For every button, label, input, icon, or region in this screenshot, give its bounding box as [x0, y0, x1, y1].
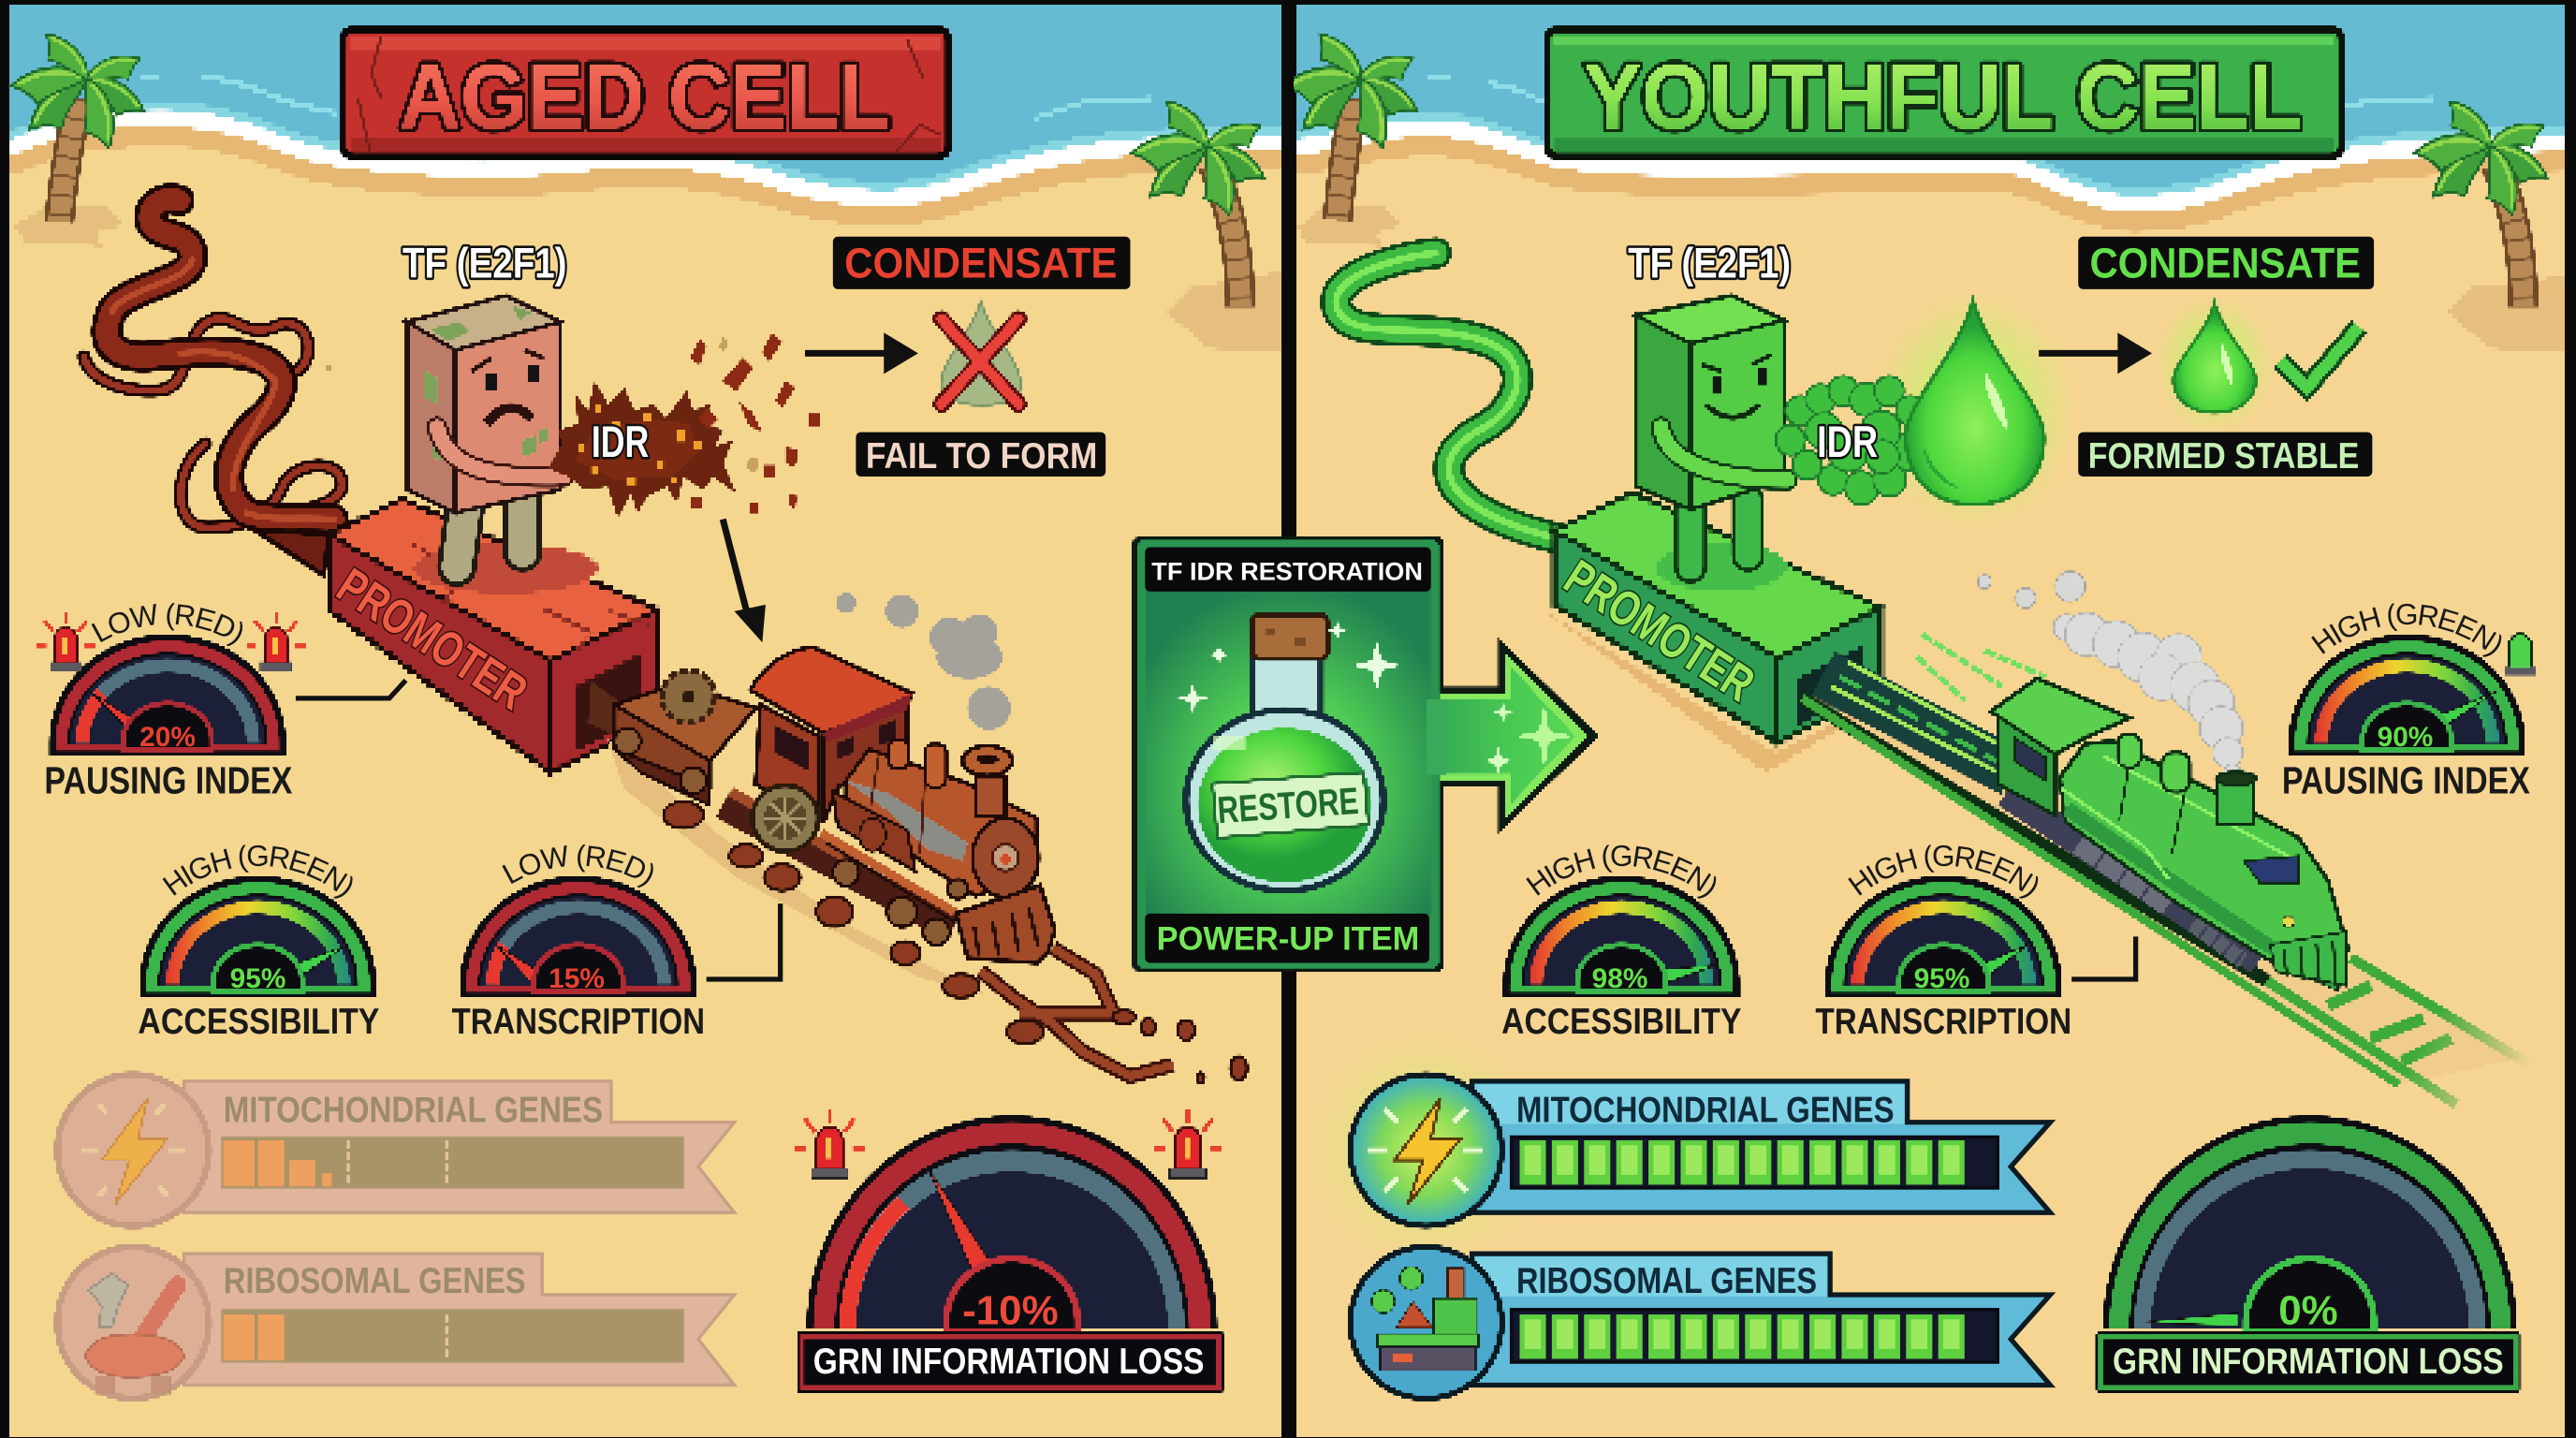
- palm tree: youthful left: [1283, 27, 1422, 220]
- value 95%: 95%: [1914, 963, 1969, 994]
- palm tree: aged left: [9, 27, 149, 222]
- gauge name: PAUSING INDEX: [44, 759, 292, 802]
- chromatin ribbon: youthful: [1336, 253, 1560, 539]
- high label: HIGH (GREEN): [1848, 844, 2039, 899]
- title text: YOUTHFUL CELL: [1584, 45, 2302, 148]
- beach background: aged: [10, 5, 1283, 1438]
- gene bar: ribosomal aged: [184, 1254, 735, 1386]
- character label: TF E2F1: TF (E2F1): [402, 240, 567, 287]
- palm tree: youthful right: [2413, 95, 2553, 307]
- IDR label: IDR: [592, 418, 649, 467]
- title banner: youthful cell: [1544, 26, 2345, 159]
- tangled chromatin: aged: [84, 199, 342, 575]
- promoter label: PROMOTER: [1555, 550, 1764, 712]
- transcription factor character: youthful: [1628, 240, 1791, 567]
- value 15%: 15%: [549, 963, 605, 994]
- formed stable tag: FORMED STABLE: [2088, 436, 2359, 477]
- connector: transcription to train: [2071, 936, 2136, 979]
- gene label: RIBOSOMAL GENES: [224, 1261, 526, 1301]
- high label: HIGH (GREEN): [1526, 844, 1717, 899]
- low label: LOW (RED): [502, 844, 653, 888]
- icon: lightning: [1351, 1075, 1501, 1225]
- condensate tag: CONDENSATE: [844, 240, 1117, 287]
- glow behind gene icons: [1308, 1032, 1544, 1269]
- gauge: accessibility youthful: [1501, 844, 1742, 1042]
- connector: pausing to promoter: [296, 681, 406, 698]
- value 90%: 90%: [2378, 722, 2433, 753]
- alarm lights: pausing aged: [37, 612, 305, 671]
- gene label: RIBOSOMAL GENES: [1516, 1261, 1817, 1301]
- promoter label: PROMOTER: [328, 558, 536, 721]
- condensate tag: CONDENSATE: [2089, 240, 2361, 287]
- condensate status: fail: [833, 237, 1131, 477]
- gauge: GRN information loss aged: [797, 1116, 1224, 1393]
- gauge: transcription youthful: [1815, 844, 2071, 1042]
- value 20%: 20%: [139, 722, 196, 753]
- value 0%: 0%: [2278, 1288, 2338, 1334]
- gauge name: TRANSCRIPTION: [1815, 1002, 2071, 1042]
- promoter block: aged: [328, 500, 657, 772]
- gauge name: ACCESSIBILITY: [138, 1002, 380, 1042]
- block shadow on top: [414, 544, 598, 594]
- IDR fragments: aged: [326, 333, 820, 518]
- arrow: IDR to condensate: [805, 339, 912, 368]
- icon: stable droplet: [2156, 296, 2274, 433]
- gauge: accessibility aged: [138, 844, 380, 1042]
- high label: HIGH (GREEN): [2311, 603, 2501, 657]
- gene label: MITOCHONDRIAL GENES: [224, 1091, 603, 1131]
- gauge name: PAUSING INDEX: [2282, 759, 2530, 802]
- icon: ribosome factory: [1351, 1247, 1501, 1399]
- transcription factor character: aged: [402, 240, 567, 567]
- gauge: pausing index youthful: [2282, 603, 2530, 802]
- gauge name: TRANSCRIPTION: [452, 1002, 705, 1042]
- arrow: IDR to train: [723, 520, 766, 642]
- fail to form tag: FAIL TO FORM: [866, 436, 1097, 477]
- value -10%: -10%: [962, 1288, 1059, 1334]
- icon: restore potion: [1178, 614, 1401, 890]
- power-up tag: POWER-UP ITEM: [1157, 920, 1419, 957]
- gauge: pausing index aged: [44, 603, 292, 802]
- gauge: transcription aged: [452, 844, 705, 1042]
- high label: HIGH (GREEN): [163, 844, 353, 899]
- beach background: youthful: [1295, 5, 2566, 1438]
- panel: youthful cell: [1294, 5, 2565, 1437]
- promoter block: youthful: [1544, 493, 1889, 772]
- connector: transcription to train: [707, 903, 781, 979]
- divider between panels: [1281, 0, 1294, 1438]
- rusted train: aged: [588, 648, 1247, 1083]
- card heading tag: [1145, 547, 1431, 592]
- potion label: RESTORE: [1216, 779, 1360, 831]
- alarm lights: GRN aged: [795, 1109, 1222, 1178]
- icon: failed droplet with red X: [941, 302, 1020, 405]
- title banner: aged cell: [340, 26, 951, 159]
- power-up card: TF IDR restoration: [1132, 536, 1445, 973]
- gene bar: mitochondrial youthful: [1472, 1081, 2050, 1212]
- gene label: MITOCHONDRIAL GENES: [1516, 1091, 1895, 1131]
- card heading tag: TF IDR RESTORATION: [1151, 557, 1423, 586]
- icon: green check: [2280, 327, 2359, 388]
- gauge name: ACCESSIBILITY: [1501, 1002, 1742, 1042]
- gauge name: GRN INFORMATION LOSS: [813, 1342, 1204, 1382]
- value 95%: 95%: [230, 963, 285, 994]
- power-up tag: [1145, 914, 1429, 962]
- gauge: GRN information loss youthful: [2097, 1116, 2520, 1393]
- arrow: droplet to condensate: [2039, 339, 2145, 368]
- condensate status: formed: [2078, 237, 2374, 477]
- steam puffs: youthful: [1978, 572, 2243, 781]
- gene bar: mitochondrial aged: [184, 1081, 735, 1212]
- IDR label: IDR: [1817, 418, 1878, 467]
- palm tree: aged right: [1130, 95, 1269, 307]
- panel: aged cell: [8, 5, 1320, 1437]
- icon: faded lightning: [57, 1075, 209, 1225]
- sleek train on track: youthful: [1802, 634, 2530, 1104]
- gene bar: ribosomal youthful: [1472, 1254, 2050, 1386]
- low label: LOW (RED): [92, 603, 242, 646]
- title text: AGED CELL: [399, 45, 890, 148]
- value 98%: 98%: [1592, 963, 1647, 994]
- IDR cluster and condensate droplet: youthful: [1776, 292, 2076, 529]
- arrow: restoration to youthful: [1426, 638, 1599, 833]
- green status light: [2506, 634, 2535, 675]
- gauge name: GRN INFORMATION LOSS: [2113, 1342, 2504, 1382]
- character label: TF E2F1: TF (E2F1): [1628, 240, 1791, 287]
- smoke puffs: aged: [836, 594, 1010, 729]
- icon: faded ribosome: [57, 1247, 209, 1399]
